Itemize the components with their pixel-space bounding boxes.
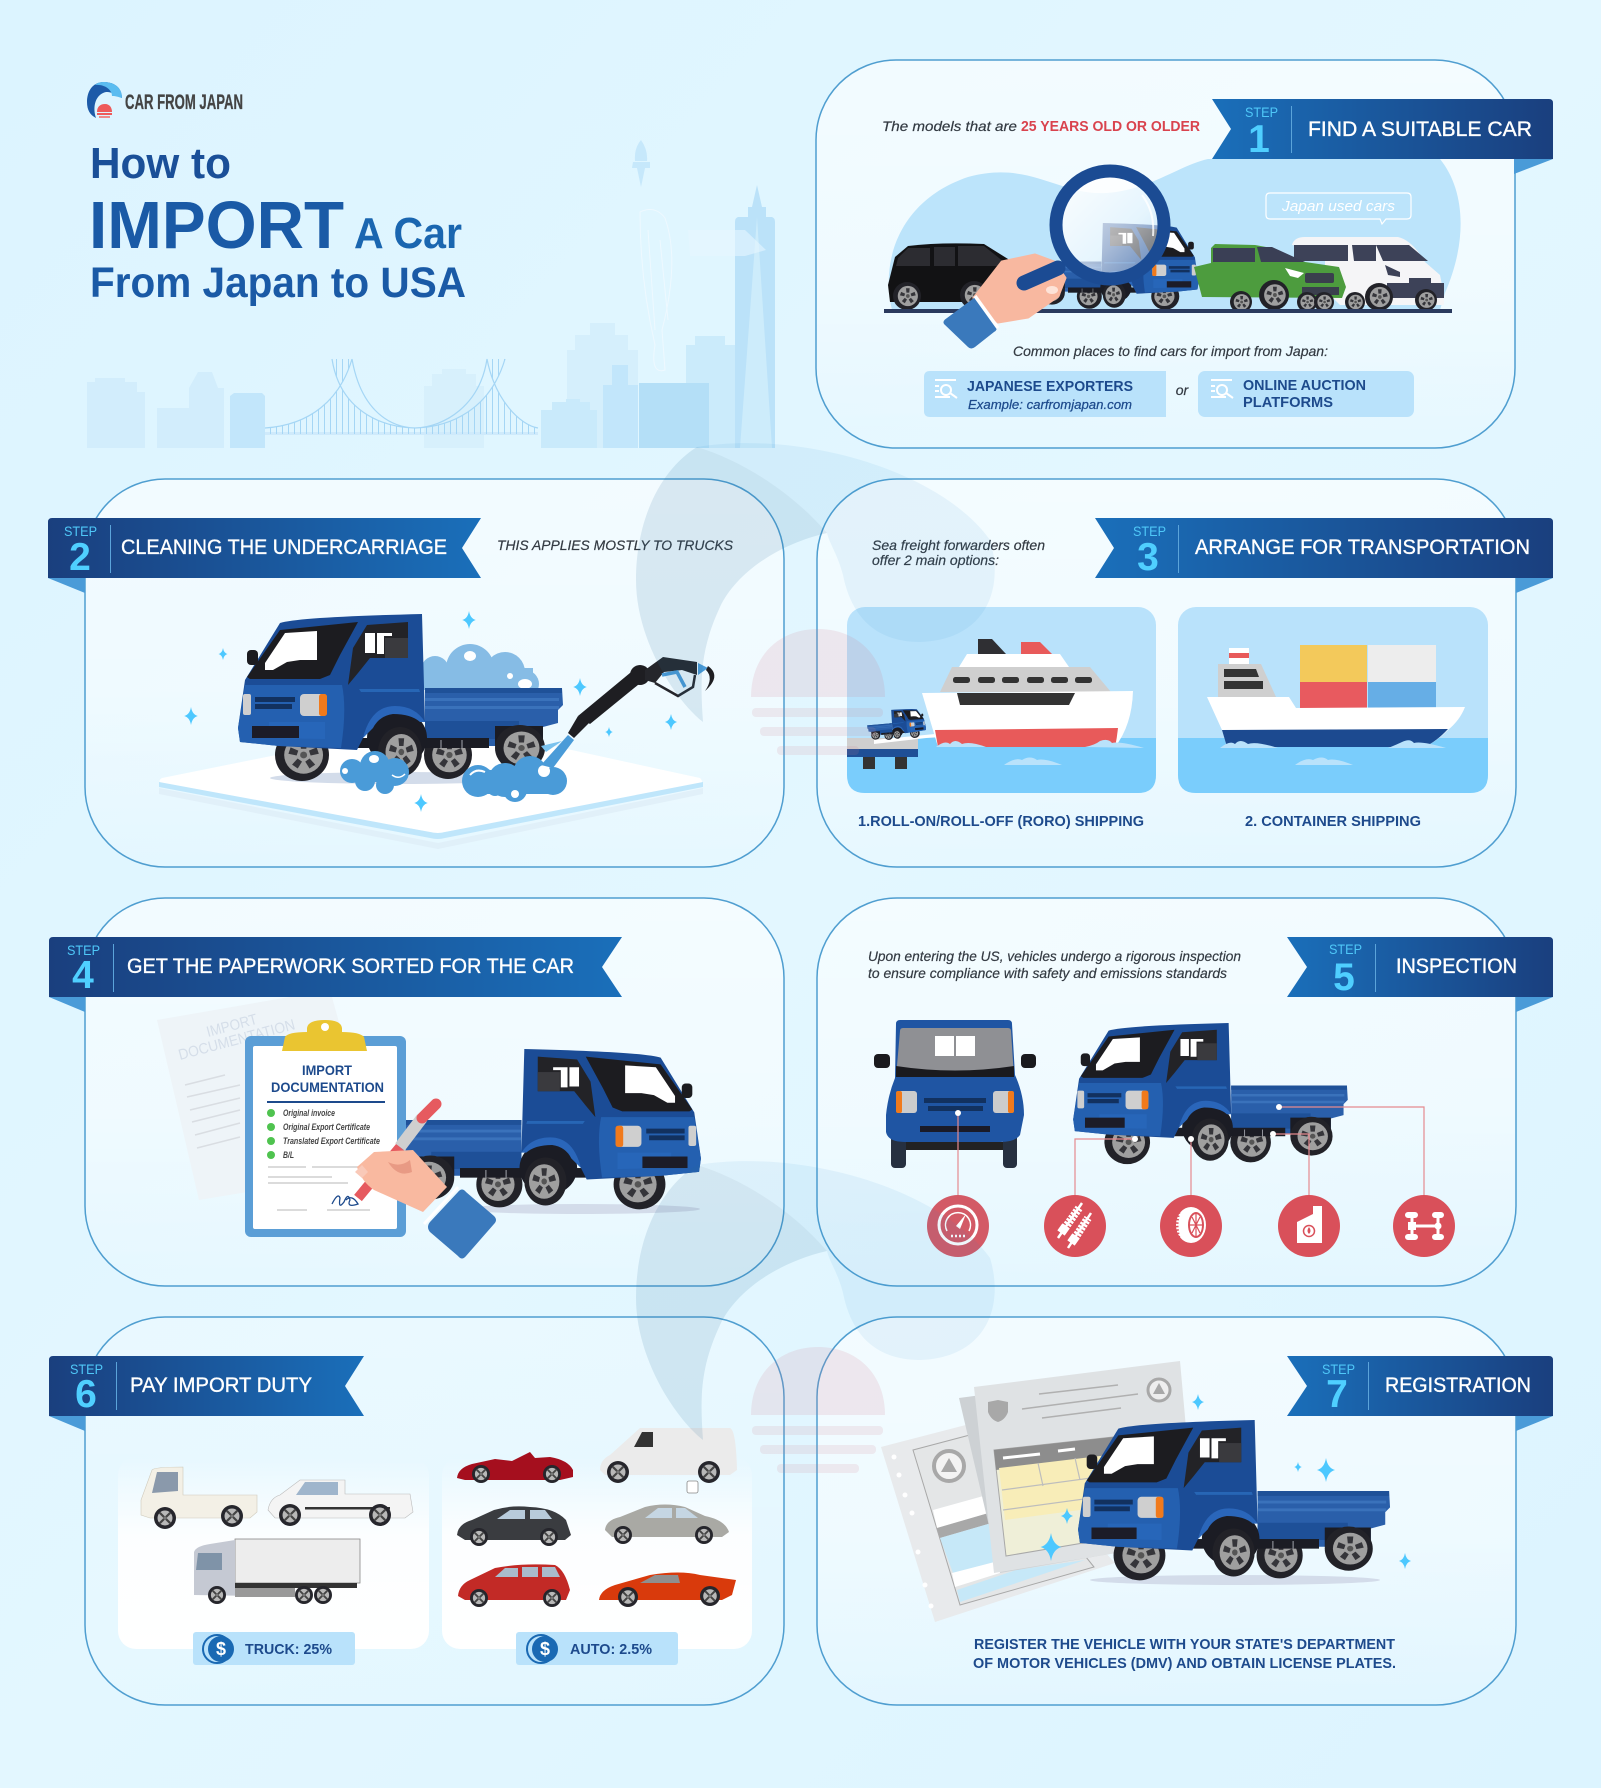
option: online auction platforms bbox=[1198, 371, 1414, 417]
intro text: Sea freight forwarders often bbox=[872, 537, 1045, 553]
document checklist: B/L bbox=[283, 1150, 294, 1160]
panel: step 4 paperwork bbox=[49, 898, 784, 1286]
exporters label: JAPANESE EXPORTERS bbox=[967, 378, 1133, 395]
tile: autos bbox=[442, 1428, 752, 1649]
label: container shipping: 2. CONTAINER SHIPPING bbox=[1245, 813, 1421, 830]
ship decks bbox=[959, 654, 1069, 667]
blue truck bbox=[389, 1049, 701, 1209]
ribbon: step 5: INSPECTION bbox=[1396, 955, 1517, 978]
document checklist: Original Export Certificate bbox=[283, 1122, 370, 1132]
ribbon: step 7: REGISTRATION bbox=[1385, 1374, 1531, 1397]
icon: search list bbox=[935, 380, 957, 398]
ribbon: step 3 bbox=[1095, 518, 1553, 593]
logo wordmark: CAR FROM JAPAN bbox=[125, 91, 243, 114]
panel: step 3 arrange for transportation bbox=[817, 479, 1553, 867]
white pickup bbox=[268, 1480, 413, 1526]
back sheet: DOCUMENTATION bbox=[177, 1016, 297, 1064]
title: IMPORT bbox=[89, 188, 344, 263]
ribbon: step 2 bbox=[48, 518, 481, 593]
or separator: or bbox=[1176, 382, 1190, 398]
back sheet bbox=[959, 1370, 1190, 1573]
panel: step 6 pay import duty bbox=[49, 1317, 784, 1705]
clipboard bbox=[245, 1020, 406, 1237]
speech bubble: japan used cars bbox=[1266, 193, 1411, 224]
blue truck bbox=[238, 614, 563, 781]
red minivan bbox=[458, 1564, 570, 1607]
ribbon: step 5: STEP bbox=[1329, 941, 1362, 957]
box truck bbox=[194, 1539, 360, 1604]
tile: trucks bbox=[118, 1457, 429, 1649]
registration instruction: OF MOTOR VEHICLES (DMV) AND OBTAIN LICENSE PLATES. bbox=[973, 1655, 1396, 1672]
white van bbox=[600, 1428, 737, 1483]
icon: chassis bbox=[1393, 1195, 1455, 1257]
logo bbox=[87, 82, 243, 118]
blue truck bbox=[1030, 223, 1199, 310]
ribbon: step 6: STEP bbox=[70, 1361, 103, 1377]
logo mark bbox=[87, 82, 122, 118]
white van bbox=[1292, 237, 1444, 312]
ribbon: step 7: 7 bbox=[1326, 1373, 1348, 1416]
ship funnels bbox=[978, 639, 1006, 654]
icon: shock absorbers bbox=[1044, 1195, 1106, 1257]
small truck on ramp bbox=[866, 707, 927, 742]
registration instruction: REGISTER THE VEHICLE WITH YOUR STATE'S DEPARTMENT bbox=[974, 1636, 1395, 1653]
black suv bbox=[888, 243, 1020, 310]
black hatchback bbox=[457, 1506, 571, 1546]
ribbon: step 3: 3 bbox=[1137, 536, 1159, 579]
icon: search list bbox=[1211, 380, 1233, 398]
ribbon: step 7 bbox=[1287, 1356, 1553, 1431]
truck side view bbox=[1073, 1023, 1348, 1164]
icon: coin: $ bbox=[216, 1639, 226, 1659]
back sheet bbox=[157, 990, 380, 1200]
ribbon: step 6: PAY IMPORT DUTY bbox=[130, 1374, 312, 1397]
white mini truck bbox=[141, 1467, 257, 1529]
icon: coin bbox=[527, 1635, 558, 1663]
icon: speedometer bbox=[927, 1195, 989, 1257]
truck shadow bbox=[460, 1204, 700, 1214]
intro text: The models that are bbox=[882, 118, 1017, 134]
ribbon: step 7: STEP bbox=[1322, 1361, 1355, 1377]
hand with pen bbox=[355, 1104, 496, 1258]
ribbon: step 4 bbox=[49, 937, 622, 1012]
document checklist: Translated Export Certificate bbox=[283, 1136, 380, 1146]
age highlight: 25 YEARS OLD OR OLDER bbox=[1021, 119, 1201, 135]
ribbon: step 1: 1 bbox=[1248, 118, 1270, 161]
pressure washer bbox=[541, 657, 714, 768]
ribbon: step 4: 4 bbox=[72, 954, 94, 997]
watermark logo overlay bottom bbox=[636, 1161, 995, 1473]
clip bbox=[282, 1020, 367, 1051]
panel: step 2 cleaning the undercarriage bbox=[48, 479, 784, 867]
ribbon: step 2: STEP bbox=[64, 523, 97, 539]
side note: THIS APPLIES MOSTLY TO TRUCKS bbox=[497, 537, 734, 553]
speech bubble: japan used cars: Japan used cars bbox=[1281, 198, 1396, 215]
blue truck bbox=[1078, 1420, 1390, 1580]
truck shadow bbox=[1090, 1575, 1380, 1585]
registration documents bbox=[881, 1361, 1196, 1622]
waves bbox=[936, 740, 1144, 765]
ribbon: step 4: STEP bbox=[67, 942, 100, 958]
containers bbox=[1300, 645, 1367, 682]
inspection leader lines bbox=[955, 1104, 1424, 1195]
intro text: to ensure compliance with safety and emissions standards bbox=[868, 965, 1227, 981]
document checklist: Original invoice bbox=[283, 1108, 335, 1118]
auto rate: AUTO: 2.5% bbox=[570, 1641, 652, 1658]
document heading: DOCUMENTATION bbox=[271, 1079, 384, 1095]
waves bbox=[1220, 740, 1446, 765]
badge: auto duty bbox=[516, 1632, 678, 1665]
skyline with bridge and statue of liberty bbox=[87, 140, 775, 448]
sparkles bbox=[1040, 1394, 1411, 1569]
title bbox=[89, 139, 466, 307]
magnifying glass and hand bbox=[943, 171, 1164, 348]
stray checkbox glyph bbox=[687, 1481, 698, 1493]
ribbon: step 4: GET THE PAPERWORK SORTED FOR THE CAR bbox=[127, 955, 574, 978]
ribbon: step 6: 6 bbox=[75, 1373, 97, 1416]
foam rear bbox=[462, 756, 567, 802]
title: How to bbox=[90, 139, 231, 188]
truck rate: TRUCK: 25% bbox=[245, 1641, 332, 1658]
title: From Japan to USA bbox=[90, 259, 466, 307]
green pickup bbox=[1194, 244, 1346, 313]
ribbon: step 3: STEP bbox=[1133, 523, 1166, 539]
ribbon: step 1: STEP bbox=[1245, 104, 1278, 120]
label: roro shipping: 1.ROLL-ON/ROLL-OFF (RORO) SHIPPING bbox=[858, 813, 1144, 830]
ship bridge bbox=[1218, 664, 1276, 697]
signature bbox=[332, 1196, 358, 1205]
ribbon: step 3: ARRANGE FOR TRANSPORTATION bbox=[1195, 536, 1530, 559]
wash platform bbox=[159, 730, 703, 849]
truck shadow bbox=[270, 772, 530, 784]
main licence form bbox=[974, 1361, 1196, 1573]
badge: truck duty bbox=[193, 1632, 355, 1665]
panel: step 1 find a suitable car bbox=[816, 60, 1553, 448]
auction label: ONLINE AUCTION bbox=[1243, 377, 1366, 394]
sleeve bbox=[428, 1190, 496, 1258]
dock bbox=[847, 738, 918, 749]
caption: common places: Common places to find cars for import from Japan: bbox=[1013, 343, 1328, 359]
ribbon: step 2: 2 bbox=[69, 536, 91, 579]
silver sedan bbox=[605, 1504, 729, 1544]
watermark logo overlay top bbox=[636, 443, 995, 755]
illustration blob bbox=[889, 159, 1461, 310]
foam behind bed bbox=[421, 644, 539, 698]
ground line bbox=[884, 309, 1452, 313]
ribbon: step 6 bbox=[49, 1356, 364, 1431]
tile: container ship bbox=[1178, 607, 1488, 793]
ship hull bbox=[1207, 697, 1465, 747]
document checklist bbox=[267, 1108, 380, 1160]
intro text: offer 2 main options: bbox=[872, 552, 999, 568]
red convertible bbox=[457, 1452, 573, 1483]
left perforated form bbox=[881, 1420, 1115, 1622]
icon: coin: $ bbox=[540, 1639, 550, 1659]
tile: roro ship bbox=[847, 607, 1156, 793]
exporters example: Example: carfromjapan.com bbox=[968, 397, 1132, 412]
ship hull bbox=[922, 691, 1133, 747]
intro text: Upon entering the US, vehicles undergo a rigorous inspection bbox=[868, 948, 1241, 964]
document heading: IMPORT bbox=[302, 1062, 352, 1078]
option: japanese exporters bbox=[924, 371, 1166, 417]
ribbon: step 1 bbox=[1212, 99, 1553, 174]
back sheet: IMPORT bbox=[205, 1011, 259, 1041]
ribbon: step 2: CLEANING THE UNDERCARRIAGE bbox=[121, 536, 447, 559]
orange sports car bbox=[599, 1572, 736, 1607]
ribbon: step 1: FIND A SUITABLE CAR bbox=[1308, 118, 1532, 141]
ribbon: step 5 bbox=[1287, 937, 1553, 1012]
icon: coin bbox=[203, 1635, 234, 1663]
icon: tire bbox=[1160, 1195, 1222, 1257]
truck front view bbox=[874, 1020, 1036, 1168]
sparkles bbox=[184, 611, 677, 812]
panel: step 7 registration bbox=[817, 1317, 1553, 1705]
panel: step 5 inspection bbox=[817, 898, 1553, 1286]
ribbon: step 5: 5 bbox=[1333, 956, 1355, 999]
icon: oil can bbox=[1278, 1195, 1340, 1257]
auction label: PLATFORMS bbox=[1243, 394, 1333, 411]
title: A Car bbox=[354, 209, 462, 258]
foam front bbox=[340, 751, 409, 794]
